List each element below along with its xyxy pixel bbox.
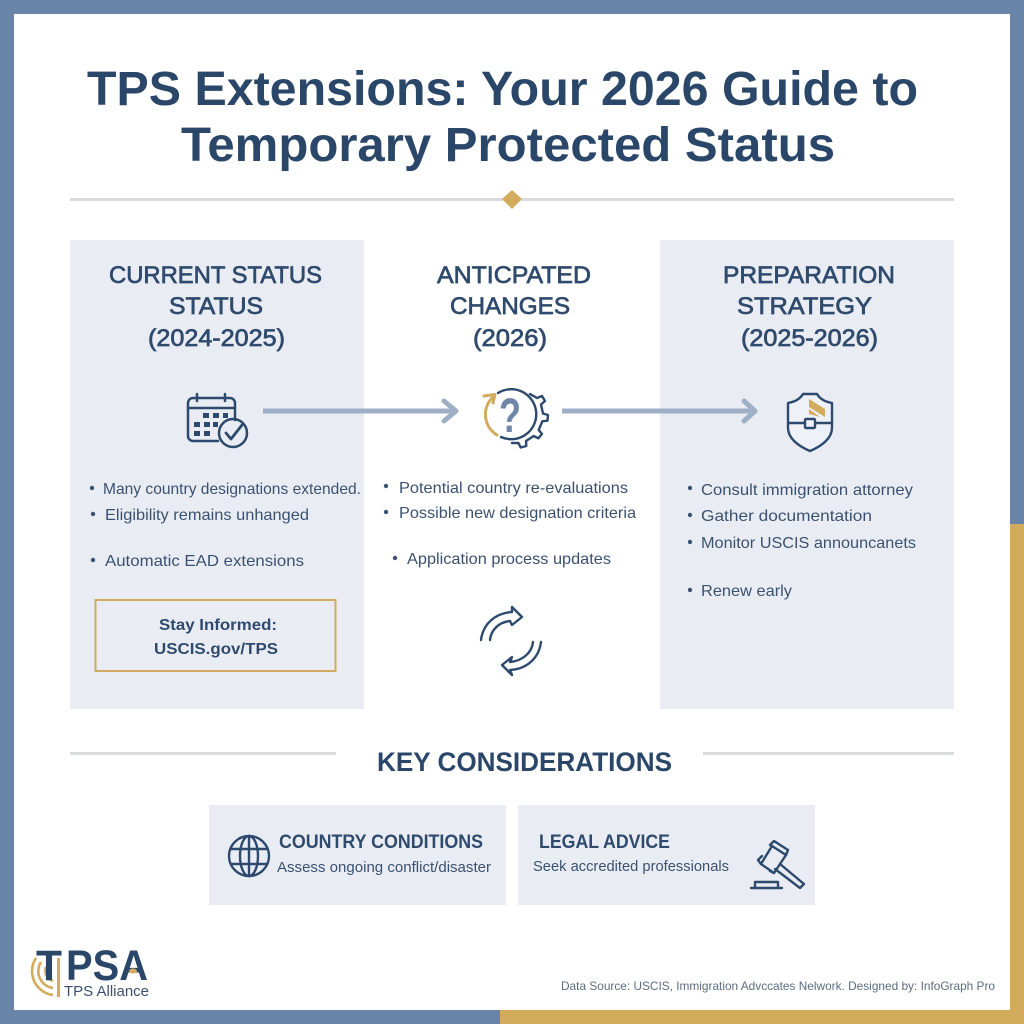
heading: anticipated changes: (2026)	[473, 325, 547, 352]
heading: preparation strategy: STRATEGY	[737, 293, 872, 320]
bullet list: current status: Automatic EAD extensions	[105, 553, 304, 570]
logo: TPS Alliance: T	[36, 942, 62, 990]
bullet list: preparation strategy: Renew early	[701, 583, 792, 600]
card: country conditions	[209, 805, 506, 905]
heading: current status: (2024-2025)	[148, 325, 285, 352]
bullet list: current status: Eligibility remains unhanged	[105, 507, 309, 524]
title divider	[70, 190, 954, 209]
heading: current status	[109, 262, 322, 352]
bullet list: preparation strategy: Monitor USCIS announcanets	[701, 535, 916, 552]
bullet list: anticipated changes: Possible new designation criteria	[399, 505, 636, 522]
bullet list: anticipated changes	[384, 480, 636, 568]
heading: preparation strategy: PREPARATION	[723, 262, 895, 289]
callout: stay informed: Stay Informed:	[159, 617, 277, 634]
heading: key considerations: KEY CONSIDERATIONS	[377, 747, 672, 777]
bullet list: preparation strategy: Gather documentation	[701, 508, 872, 525]
icon: gavel	[751, 841, 804, 888]
footer source credit: Data Source: USCIS, Immigration Advccates Nelwork. Designed by: InfoGraph Pro	[561, 979, 995, 993]
card: country conditions: Assess ongoing conflict/disaster	[277, 859, 491, 876]
card: legal advice: Seek accredited professionals	[533, 858, 729, 875]
bullet list: preparation strategy: Consult immigration attorney	[701, 482, 913, 499]
title: TPS Extensions: Your 2026 Guide to	[87, 63, 918, 116]
heading: key considerations	[70, 747, 954, 777]
heading: anticipated changes: ANTICPATED	[437, 262, 591, 289]
logo: TPS Alliance: PSA	[66, 942, 148, 990]
card: legal advice: LEGAL ADVICE	[539, 832, 670, 853]
heading: current status: STATUS	[169, 293, 263, 320]
heading: anticipated changes: CHANGES	[450, 293, 570, 320]
logo: TPS Alliance: TPS Alliance	[64, 983, 149, 1000]
card: country conditions: COUNTRY CONDITIONS	[279, 832, 483, 853]
icon: calendar with check	[188, 394, 247, 447]
heading: current status: CURRENT STATUS	[109, 262, 322, 289]
icon: gear with question mark: ?	[499, 390, 521, 443]
bullet list: anticipated changes: Potential country re-evaluations	[399, 480, 628, 497]
callout: stay informed	[96, 600, 336, 671]
panel: anticipated changes	[384, 262, 636, 675]
icon: gear with question mark	[484, 389, 548, 448]
panel: preparation strategy	[660, 240, 954, 709]
title	[87, 63, 918, 172]
icon: globe	[229, 836, 269, 876]
icon: shield	[788, 394, 832, 451]
title: Temporary Protected Status	[181, 119, 835, 172]
bullet list: current status: Many country designations extended.	[103, 481, 361, 498]
callout: stay informed: USCIS.gov/TPS	[154, 641, 278, 658]
bullet list: anticipated changes: Application process updates	[407, 551, 611, 568]
logo: TPS Alliance	[32, 942, 149, 1000]
heading: anticipated changes	[437, 262, 591, 352]
heading: preparation strategy: (2025-2026)	[741, 325, 878, 352]
icon: refresh arrows	[481, 607, 541, 675]
arrow: anticipated changes to preparation strategy	[562, 401, 755, 421]
panel: current status	[70, 240, 364, 709]
card: legal advice	[518, 805, 815, 905]
bullet list: current status	[90, 481, 361, 570]
arrow: current status to anticipated changes	[263, 401, 456, 421]
heading: preparation strategy	[723, 262, 895, 352]
bullet list: preparation strategy	[688, 482, 916, 600]
